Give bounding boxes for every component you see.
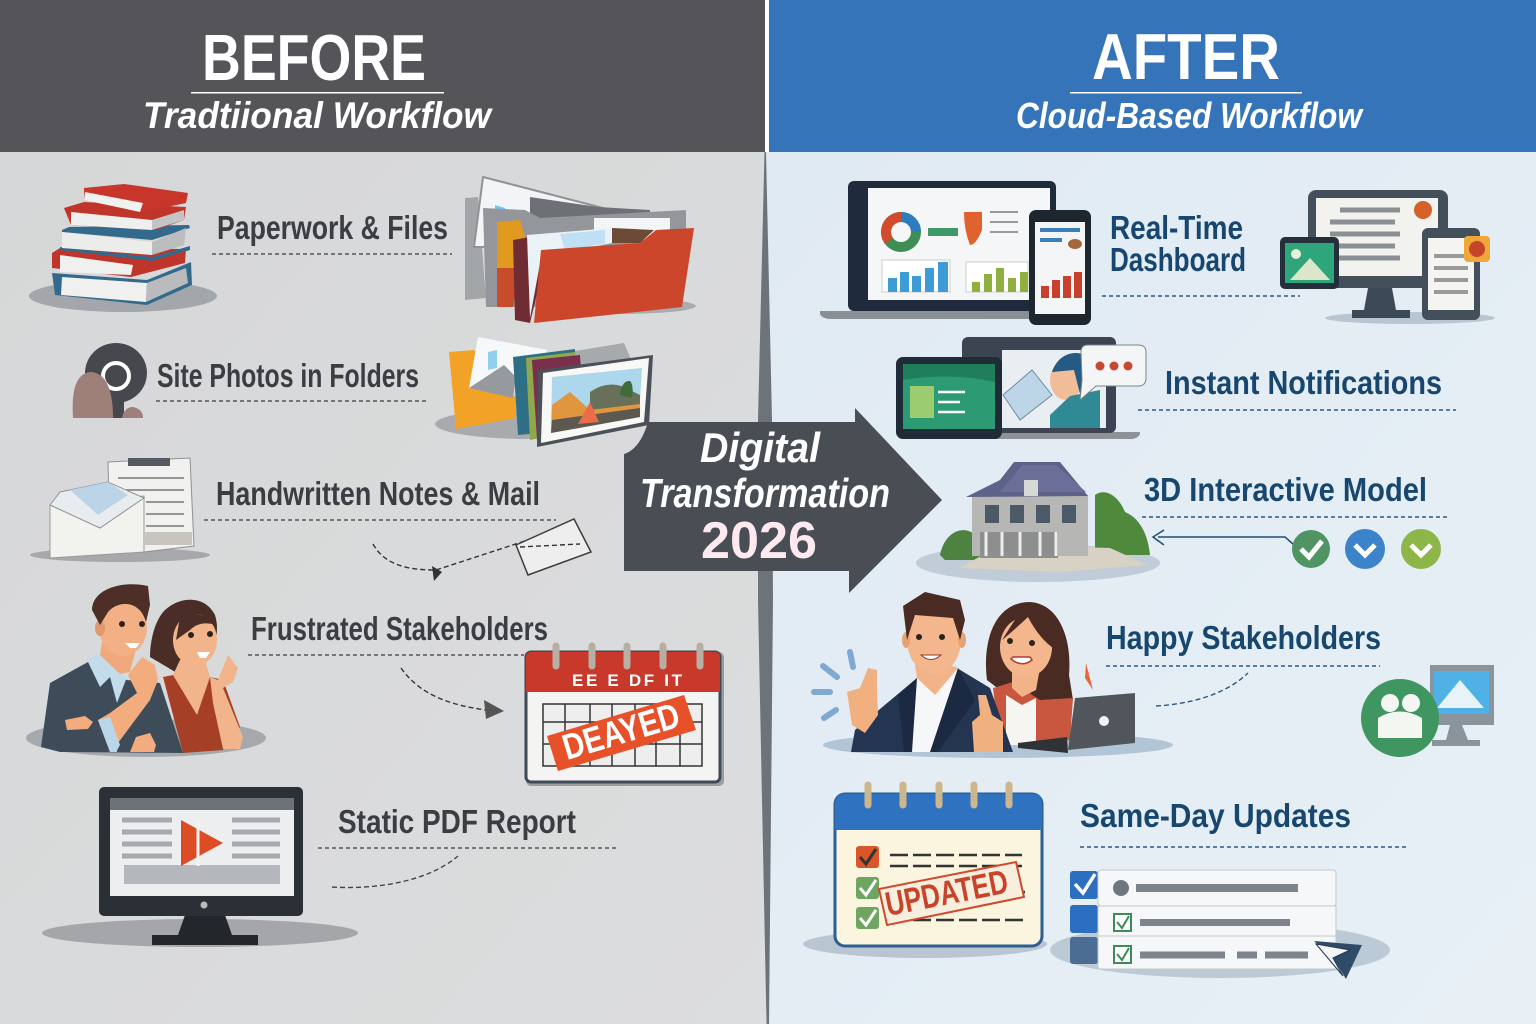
icon: lime chevron [1401, 529, 1441, 569]
header: before: BEFORE [202, 21, 426, 94]
icon: delayed calendar: DEAYED [558, 694, 684, 768]
label: instant notifications: Instant Notifications [1165, 364, 1442, 401]
arrow: digital transformation 2026: Digital [700, 424, 821, 471]
icon: monitor with video [42, 787, 358, 947]
header: after: Cloud-Based Workflow [1016, 95, 1364, 136]
icon: person badge and monitor [1361, 665, 1494, 757]
panel: after background [766, 152, 1536, 1024]
header: after: AFTER [1092, 20, 1280, 93]
label: real-time dashboard: Real-Time [1110, 209, 1243, 246]
icon: laptop and phone dashboard [820, 181, 1091, 325]
icon: monitor, tablet and phone [1280, 190, 1495, 324]
icon: updated calendar [803, 785, 1047, 958]
arrow: dashed curve [332, 856, 458, 888]
icon: photo folders [435, 337, 653, 447]
icon: delayed calendar [526, 646, 724, 786]
label: site photos: Site Photos in Folders [157, 357, 419, 394]
icon: checklist with cursor [1050, 870, 1390, 979]
label: static PDF report: Static PDF Report [338, 803, 576, 840]
header: before [0, 0, 765, 152]
icon: envelope and notes [30, 458, 210, 562]
arrow: digital transformation 2026 [624, 408, 942, 593]
icon: folders [465, 177, 696, 323]
header: before: Tradtiional Workflow [143, 95, 493, 136]
icon: tablet and laptop with notification [896, 337, 1146, 439]
icon: 3D house model [916, 462, 1160, 582]
panel: before background [0, 152, 766, 1024]
arrow: digital transformation 2026: Transformation [640, 470, 890, 516]
label: paperwork and files: Paperwork & Files [217, 209, 448, 246]
center divider [758, 152, 773, 1024]
header: after [769, 0, 1536, 152]
label: real-time dashboard [1102, 209, 1300, 296]
label: same-day updates: Same-Day Updates [1080, 797, 1351, 834]
icon: flying envelope with dashed path [373, 519, 591, 581]
icon: updated calendar: UPDATED [882, 863, 1011, 924]
icon: happy stakeholders [814, 592, 1173, 758]
icon: stack of books [29, 184, 217, 312]
icon: frustrated stakeholders [26, 584, 266, 757]
arrow: digital transformation 2026: 2026 [701, 512, 817, 570]
label: real-time dashboard: Dashboard [1110, 241, 1246, 278]
arrow: model to checks [1153, 530, 1293, 545]
arrow: dashed to calendar [401, 668, 504, 719]
icon: delayed calendar: EE E DF IT [572, 671, 683, 690]
label: 3D interactive model: 3D Interactive Model [1144, 471, 1427, 508]
label: happy stakeholders: Happy Stakeholders [1106, 619, 1381, 656]
icon: green check [1292, 530, 1330, 568]
icon: camera [73, 343, 147, 418]
label: frustrated stakeholders: Frustrated Stakeholders [251, 610, 548, 647]
label: handwritten notes: Handwritten Notes & Mail [216, 475, 540, 512]
arrow: dashed curve happy [1156, 673, 1248, 706]
icon: blue chevron [1345, 529, 1385, 569]
